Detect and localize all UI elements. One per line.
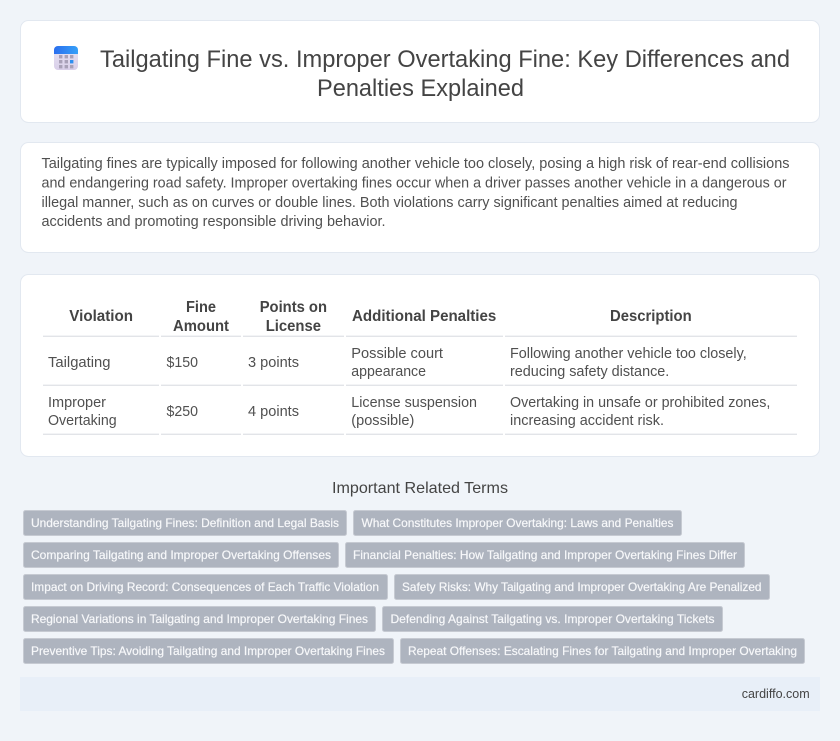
tag: Comparing Tailgating and Improper Overtaking Offenses <box>31 548 331 562</box>
text block: summary: accidents and promoting responsible driving behavior. <box>42 214 386 230</box>
title: Tailgating Fine vs. Improper Overtaking Fine: Key Differences and <box>100 46 790 73</box>
table row: improper overtaking: increasing accident risk. <box>510 413 664 429</box>
tag <box>24 542 338 568</box>
table row: tailgating: $150 <box>166 355 198 371</box>
table row: tailgating: reducing safety distance. <box>510 364 669 380</box>
tag <box>346 542 744 568</box>
text block: summary <box>42 156 790 230</box>
table row: improper overtaking: License suspension <box>351 395 477 411</box>
table header: Amount <box>173 318 230 335</box>
table header <box>69 299 692 335</box>
table row: tailgating: 3 points <box>248 355 299 371</box>
table row: tailgating: appearance <box>351 364 426 380</box>
footer <box>20 677 820 711</box>
table row: tailgating: Tailgating <box>48 355 110 371</box>
table row: improper overtaking: Overtaking <box>48 413 117 429</box>
panel: comparison table <box>20 274 820 456</box>
tag: Preventive Tips: Avoiding Tailgating and Improper Overtaking Fines <box>31 644 385 658</box>
tag <box>24 574 388 600</box>
title <box>100 46 790 102</box>
table row: improper overtaking: 4 points <box>248 404 299 420</box>
table row: improper overtaking <box>48 395 770 429</box>
icon: calendar <box>54 46 78 70</box>
tag <box>400 638 804 664</box>
table header: Violation <box>69 308 133 325</box>
tag: What Constitutes Improper Overtaking: Laws and Penalties <box>362 516 674 530</box>
tag: Repeat Offenses: Escalating Fines for Tailgating and Improper Overtaking <box>408 644 797 658</box>
title: Penalties Explained <box>317 75 524 102</box>
panel: header <box>20 20 820 122</box>
table row: improper overtaking: $250 <box>166 404 198 420</box>
footer: cardiffo.com <box>742 686 810 701</box>
table row: tailgating: Possible court <box>351 346 443 362</box>
text block: summary: and endangering road safety. Improper overtaking fines occur when a driver passes another vehicle in a dangerous or <box>42 175 787 191</box>
panel: summary paragraph <box>20 142 820 252</box>
heading: related terms: Important Related Terms <box>332 480 508 497</box>
tag <box>24 638 394 664</box>
panel: related term tags <box>24 510 804 664</box>
tag <box>354 510 682 536</box>
table header: Additional Penalties <box>352 308 496 325</box>
table row: improper overtaking: Improper <box>48 395 106 411</box>
tag: Defending Against Tailgating vs. Improper Overtaking Tickets <box>390 612 714 626</box>
tag: Financial Penalties: How Tailgating and Improper Overtaking Fines Differ <box>353 548 737 562</box>
table row: tailgating: Following another vehicle too closely, <box>510 346 747 362</box>
tag <box>382 606 722 632</box>
table row: tailgating <box>48 346 747 380</box>
tag: Understanding Tailgating Fines: Definition and Legal Basis <box>31 516 339 530</box>
table header: License <box>266 318 321 335</box>
text block: summary: illegal manner, such as on curves or double lines. Both violations carry significant penalties aimed at reducing <box>42 195 738 211</box>
tag <box>394 574 770 600</box>
table row: improper overtaking: (possible) <box>351 413 414 429</box>
tag <box>24 606 376 632</box>
text block: summary: Tailgating fines are typically imposed for following another vehicle too closely, posing a high risk of rear-end collisions <box>42 156 790 172</box>
table header: Description <box>610 308 692 325</box>
tag: Safety Risks: Why Tailgating and Improper Overtaking Are Penalized <box>402 580 762 594</box>
tag <box>24 510 346 536</box>
table header: Fine <box>186 299 216 316</box>
tag: Impact on Driving Record: Consequences of Each Traffic Violation <box>31 580 379 594</box>
table header: Points on <box>260 299 327 316</box>
table row: improper overtaking: Overtaking in unsafe or prohibited zones, <box>510 395 770 411</box>
tag: Regional Variations in Tailgating and Improper Overtaking Fines <box>31 612 368 626</box>
